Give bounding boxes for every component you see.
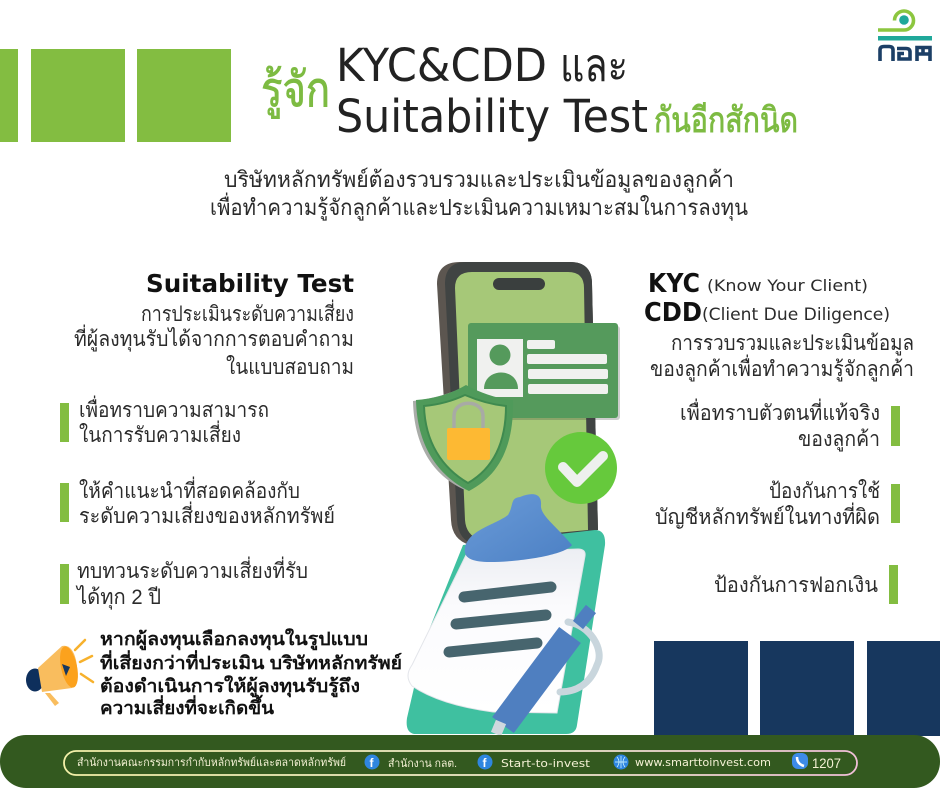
bullet: suitable advice: ให้คำแนะนำที่สอดคล้องกับ — [79, 476, 300, 503]
illustration: ID card — [468, 323, 620, 420]
icon: megaphone — [26, 640, 93, 706]
footer: facebook office: สำนักงาน กลต. — [388, 758, 457, 770]
bullet: review every two years: ทบทวนระดับความเสี่ยงที่รับ — [77, 556, 308, 583]
heading: KYC — [648, 269, 868, 299]
description: Suitability Test: การประเมินระดับความเสี่ยง — [141, 299, 354, 326]
heading: KYC: (Know Your Client) — [707, 276, 868, 295]
panel: Suitability Test — [60, 269, 354, 610]
heading: CDD: (Client Due Diligence) — [702, 305, 890, 325]
callout: ความเสี่ยงที่จะเกิดขึ้น — [100, 694, 275, 718]
footer: website: www.smarttoinvest.com — [635, 756, 771, 769]
title: กันอีกสักนิด — [654, 101, 798, 140]
callout: หากผู้ลงทุนเลือกลงทุนในรูปแบบ — [100, 628, 368, 651]
footer: organisation name: สำนักงานคณะกรรมการกำกับหลักทรัพย์และตลาดหลักทรัพย์ — [77, 756, 346, 769]
footer: facebook start-to-invest: f — [482, 756, 488, 770]
bullet: risk capacity — [60, 395, 269, 447]
bullet: anti money laundering — [714, 565, 898, 604]
title — [261, 39, 798, 143]
footer: hotline — [792, 753, 841, 771]
heading: CDD: CDD — [644, 298, 702, 328]
decorative green squares — [0, 49, 231, 142]
description: KYC and CDD: การรวบรวมและประเมินข้อมูล — [671, 332, 914, 356]
illustration: shield with padlock — [413, 385, 513, 491]
subtitle: บริษัทหลักทรัพย์ต้องรวบรวมและประเมินข้อมูลของลูกค้า — [224, 167, 734, 193]
description: KYC and CDD — [650, 332, 914, 382]
subtitle — [210, 167, 748, 221]
footer: facebook office — [364, 754, 457, 770]
title: Suitability Test — [336, 90, 648, 143]
title: รู้จัก — [261, 64, 330, 119]
footer: facebook start-to-invest: Start-to-invest — [501, 757, 591, 770]
footer: facebook office: f — [370, 756, 374, 770]
bullet: risk capacity: เพื่อทราบความสามารถ — [79, 395, 269, 422]
description: KYC and CDD: ของลูกค้าเพื่อทำความรู้จักลูกค้า — [650, 354, 914, 382]
callout: ต้องดำเนินการให้ผู้ลงทุนรับรู้ถึง — [100, 675, 360, 698]
subtitle: เพื่อทำความรู้จักลูกค้าและประเมินความเหมาะสมในการลงทุน — [210, 192, 748, 221]
illustration: check badge — [545, 432, 617, 504]
callout — [100, 628, 402, 718]
bullet: prevent account misuse — [655, 479, 900, 529]
illustration: clipboard — [407, 494, 605, 734]
heading: CDD — [644, 298, 890, 328]
bullet: true identity: ของลูกค้า — [798, 428, 880, 452]
navy squares — [654, 641, 940, 736]
bullet: anti money laundering: ป้องกันการฟอกเงิน — [714, 574, 878, 597]
panel: KYC and CDD — [644, 269, 914, 604]
bullet: prevent account misuse: บัญชีหลักทรัพย์ในทางที่ผิด — [655, 502, 880, 529]
bullet: review every two years: ได้ทุก 2 ปี — [75, 585, 161, 610]
title: และ — [560, 39, 628, 91]
bullet: true identity: เพื่อทราบตัวตนที่แท้จริง — [680, 398, 880, 425]
title: KYC&CDD — [336, 39, 547, 92]
bullet: suitable advice — [60, 476, 335, 528]
heading: Suitability Test: Suitability Test — [146, 269, 354, 298]
bullet: prevent account misuse: ป้องกันการใช้ — [769, 479, 880, 503]
bullet: review every two years — [60, 556, 308, 610]
heading: KYC: KYC — [648, 269, 700, 299]
bullet: suitable advice: ระดับความเสี่ยงของหลักทรัพย์ — [79, 501, 335, 528]
bullet: risk capacity: ในการรับความเสี่ยง — [79, 420, 241, 447]
footer bar — [0, 735, 940, 788]
callout: ที่เสี่ยงกว่าที่ประเมิน บริษัทหลักทรัพย์ — [100, 650, 402, 673]
illustration: phone — [437, 262, 598, 545]
bullet: true identity — [680, 398, 900, 452]
description: Suitability Test: ในแบบสอบถาม — [226, 355, 354, 379]
description: Suitability Test — [74, 299, 354, 379]
footer: hotline: 1207 — [812, 755, 841, 771]
logo: SEC Thailand — [878, 11, 932, 61]
description: Suitability Test: ที่ผู้ลงทุนรับได้จากการตอบคำถาม — [74, 324, 354, 352]
footer: facebook start-to-invest — [478, 754, 591, 770]
